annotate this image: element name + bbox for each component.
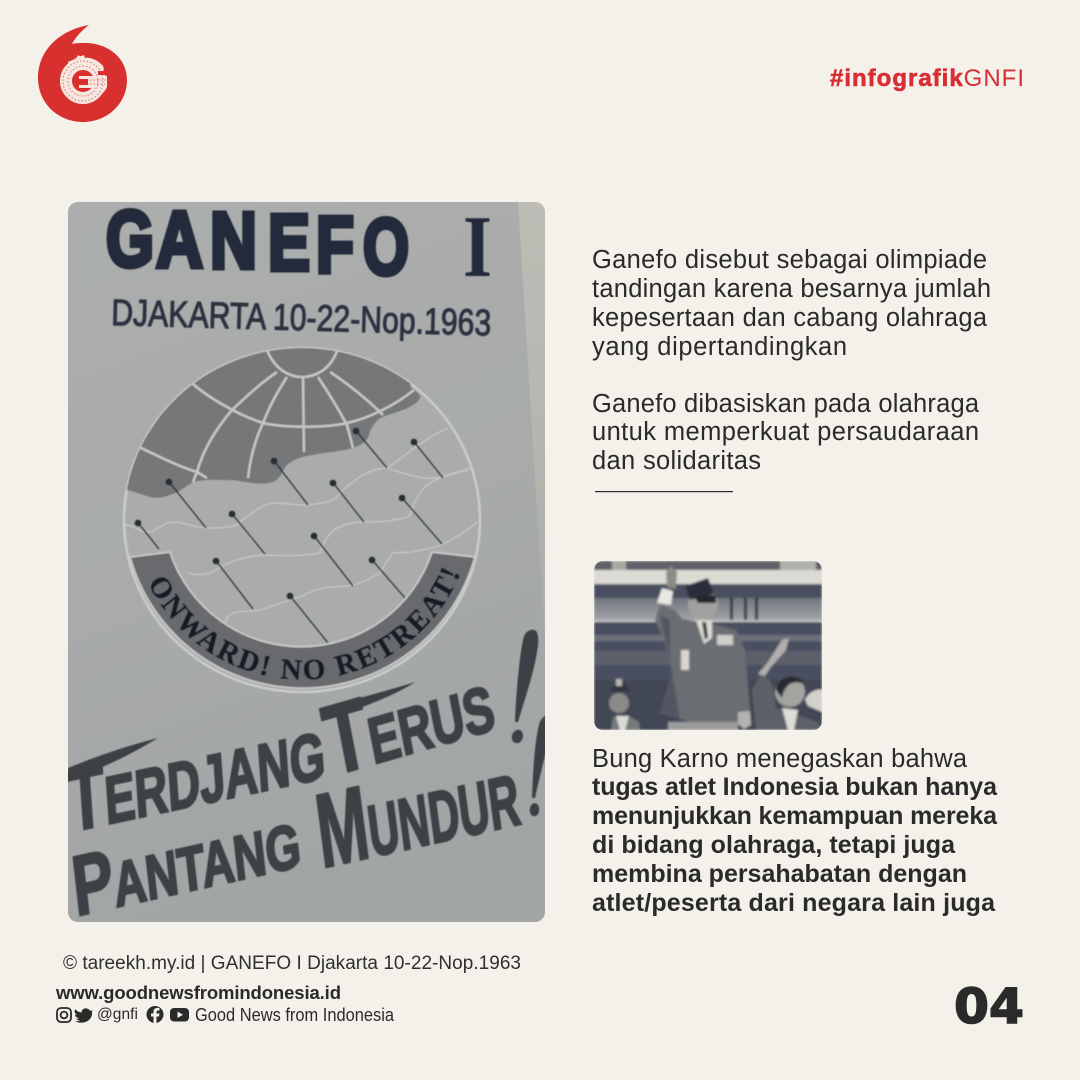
photo: Bung Karno waving (594, 561, 822, 730)
image credit: © tareekh.my.id | GANEFO I Djakarta 10-22-Nop.1963 (63, 953, 521, 974)
exclamation mark two (529, 716, 545, 817)
text block: Bung Karno statement: Bung Karno menegaskan bahwa (592, 745, 968, 773)
banner: Onward No Retreat: ONWARD! NO RETREAT! (150, 567, 460, 680)
poster title: GANEFO I: N (210, 196, 257, 285)
page number: 04 (954, 979, 1024, 1035)
text block: Ganefo as rival Olympics: tandingan karena besarnya jumlah (592, 275, 991, 303)
hashtag: #infografikGNFI: #infografikGNFI (830, 65, 1024, 92)
poster title: GANEFO I: O (363, 202, 409, 291)
main figure (655, 566, 751, 730)
poster title: GANEFO I: F (316, 200, 354, 289)
text block: Ganefo solidarity: dan solidaritas (592, 447, 761, 475)
text block: Ganefo as rival Olympics: Ganefo disebut sebagai olimpiade (592, 246, 987, 274)
text block: Bung Karno statement: membina persahabatan dengan (592, 860, 967, 888)
poster title: GANEFO I: I (463, 199, 492, 296)
slogan: Terdjang Terus (64, 630, 538, 851)
slogan: Pantang Mundur: PANTANG (67, 790, 305, 934)
slogan: Pantang Mundur: MUNDUR (310, 731, 525, 891)
poster title: GANEFO I (106, 207, 490, 278)
text block: Bung Karno statement: menunjukkan kemampuan mereka (592, 802, 998, 830)
text block: Ganefo solidarity: untuk memperkuat persaudaraan (592, 418, 979, 446)
slogan: Terdjang Terus: TERUS (315, 641, 501, 797)
exclamation mark one (512, 630, 538, 743)
name: Good News from Indonesia: Good News from Indonesia (195, 1005, 395, 1025)
text block: Bung Karno statement: atlet/peserta dari negara lain juga (592, 889, 996, 917)
text block: Ganefo solidarity (592, 390, 980, 475)
social icons and handles (57, 1005, 395, 1025)
ocean wave lines (125, 428, 477, 622)
poster title: GANEFO I: E (268, 198, 310, 287)
website url: www.goodnewsfromindonesia.id (55, 982, 341, 1003)
poster title: GANEFO I: G (106, 194, 154, 283)
icon: twitter (75, 1008, 93, 1023)
text block: Ganefo as rival Olympics: yang dipertandingkan (592, 333, 847, 361)
right man (752, 638, 822, 730)
icon: youtube (170, 1008, 189, 1022)
text block: Bung Karno statement (592, 745, 998, 917)
pins (138, 431, 443, 643)
poster title: GANEFO I: A (156, 195, 203, 284)
poster photograph: GANEFO I (68, 202, 545, 922)
text block: Ganefo as rival Olympics (592, 246, 991, 361)
icon: instagram (57, 1008, 71, 1022)
slogan: Terdjang Terus: TERDJANG (64, 697, 328, 851)
graticule (267, 350, 337, 377)
globe emblem (122, 346, 482, 694)
text block: Ganefo as rival Olympics: kepesertaan dan cabang olahraga (592, 304, 988, 332)
poster subtitle: Djakarta dates: DJAKARTA 10-22-Nop.1963 (111, 292, 492, 344)
handle: gnfi: @gnfi (97, 1006, 138, 1023)
dark land mass (120, 340, 430, 498)
left officer (608, 679, 640, 730)
text block: Bung Karno statement: tugas atlet Indonesia bukan hanya (592, 773, 998, 801)
slogan: Pantang Mundur (67, 716, 550, 934)
text block: Bung Karno statement: di bidang olahraga, tetapi juga (592, 831, 956, 859)
logo: GNFI red six with garuda G (38, 25, 127, 122)
text block: Ganefo solidarity: Ganefo dibasiskan pada olahraga (592, 390, 980, 418)
icon: facebook (146, 1006, 164, 1023)
